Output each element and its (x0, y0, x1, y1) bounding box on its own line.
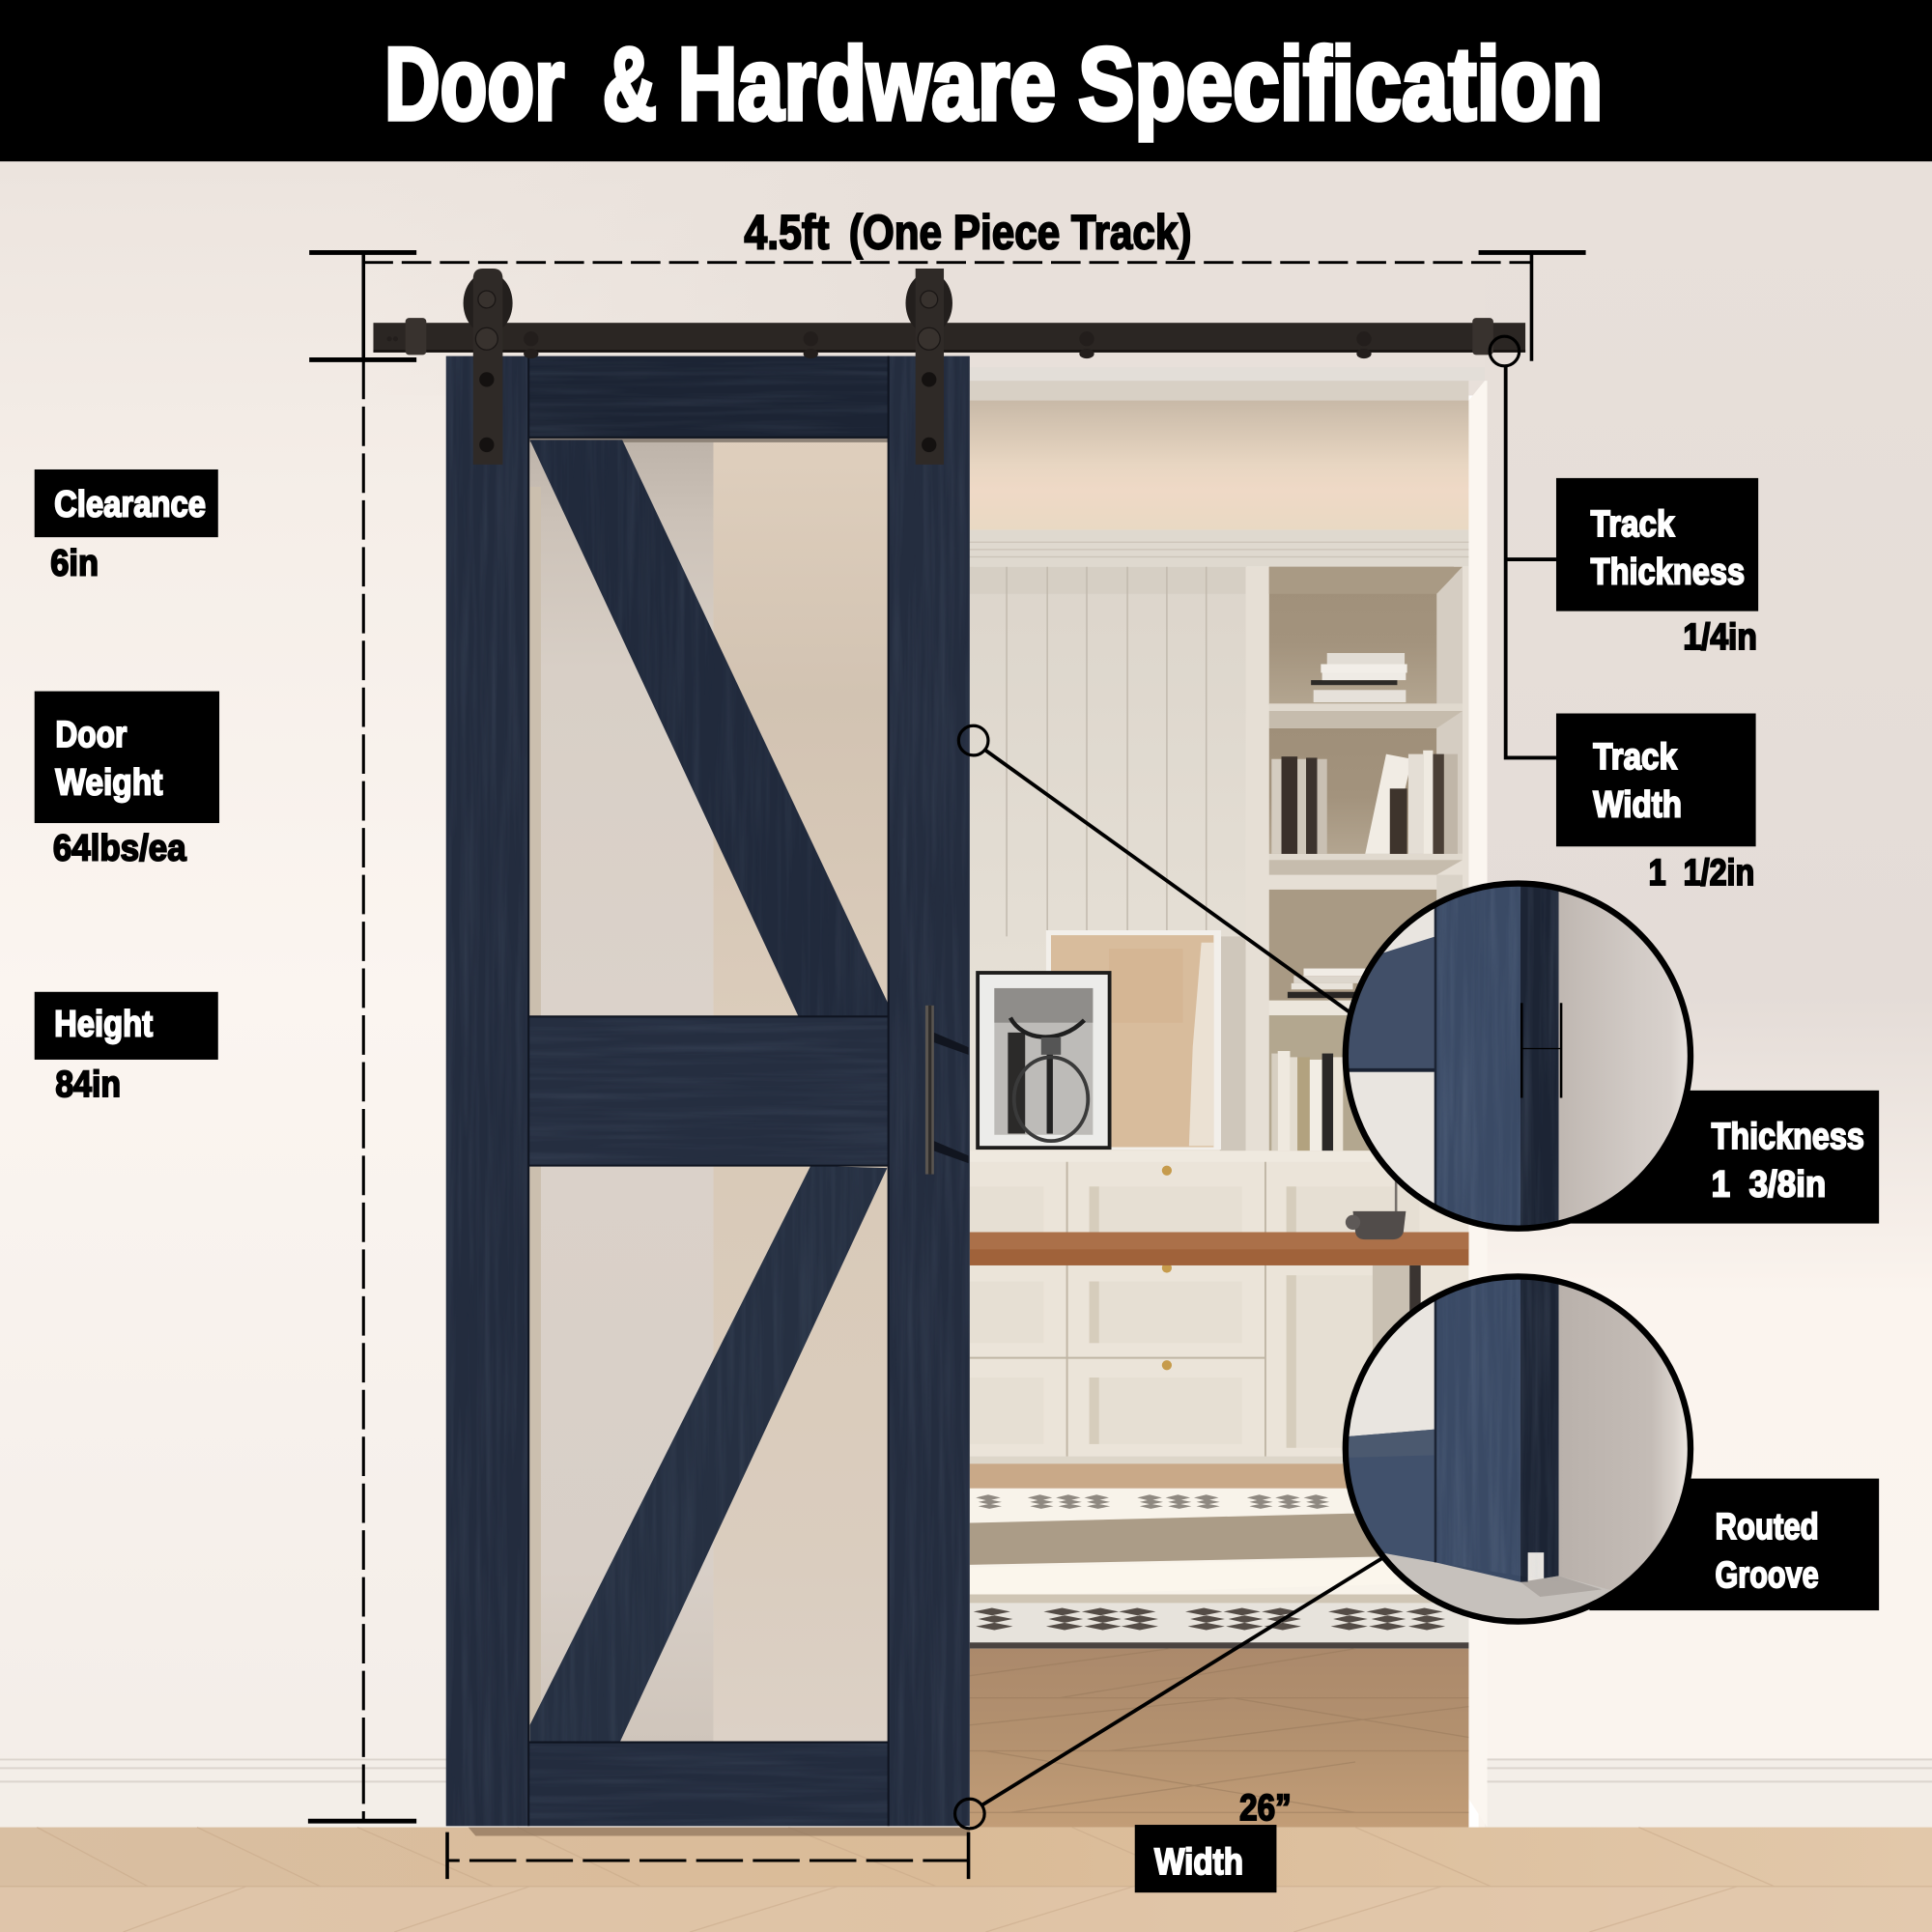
heading: track length: (One Piece Track) (849, 206, 1191, 260)
label: door width: 26” (1239, 1787, 1292, 1829)
label: routed groove box (1589, 1479, 1879, 1610)
hardwood floor (0, 1828, 1932, 1932)
dimension line: door width (447, 1833, 969, 1879)
baseboard (0, 1758, 1932, 1829)
hanger strap right (906, 269, 952, 465)
label: door weight: Weight (55, 762, 163, 804)
label: track thickness: 1/4in (1683, 616, 1757, 658)
ceiling area (970, 401, 1468, 529)
crown molding (970, 529, 1468, 567)
door pull handle (925, 1006, 969, 1175)
label: clearance (35, 469, 218, 584)
label: routed groove box: Groove (1716, 1554, 1819, 1596)
label: track width (1556, 714, 1756, 894)
art print: bicycle photo (976, 971, 1112, 1150)
label: door width (1135, 1787, 1292, 1892)
label: door width: Width (1154, 1841, 1243, 1883)
title banner: Specification (1078, 26, 1603, 142)
label: height: Height (54, 1004, 153, 1045)
shelf books (1271, 653, 1458, 1151)
label: track thickness: Track (1591, 503, 1675, 545)
back floor and rug (970, 1463, 1468, 1649)
label: track width: Width (1593, 784, 1682, 826)
label: door weight: Door (55, 714, 127, 755)
callout leader: routed groove (955, 1555, 1387, 1829)
label: track width: 1 1/2in (1649, 852, 1754, 894)
heading: track length: 4.5ft (744, 206, 829, 260)
label: thickness box: 1 3/8in (1712, 1164, 1826, 1206)
magnifier: door thickness detail (1346, 884, 1690, 1229)
label: thickness box: Thickness (1712, 1116, 1864, 1157)
label: track thickness (1556, 478, 1758, 658)
room hardwood (970, 1649, 1468, 1828)
label: track width: Track (1593, 736, 1678, 778)
room seen through the doorway (970, 367, 1488, 1828)
magnifier: routed groove detail (1346, 1276, 1690, 1622)
rug pattern: upper diamonds (976, 1494, 1329, 1509)
bookshelf (1246, 567, 1468, 1162)
barn door (446, 356, 970, 1826)
label: clearance: Clearance (54, 483, 206, 525)
title banner: Door (384, 26, 564, 142)
label: height: 84in (55, 1064, 121, 1105)
track stops (406, 318, 1493, 355)
hanger strap left (464, 269, 513, 465)
desk (970, 1180, 1468, 1321)
heading: track length (744, 206, 1191, 260)
title banner: Hardware (678, 26, 1056, 142)
barn door track (373, 318, 1525, 358)
panelled wall (970, 567, 1247, 1162)
dimension lines: clearance, track length, height (308, 252, 1586, 1821)
title banner: & (603, 26, 657, 142)
door frame and braces (446, 356, 970, 1826)
label: thickness box (1565, 1091, 1879, 1224)
label: routed groove box: Routed (1716, 1506, 1819, 1548)
label: track thickness: Thickness (1591, 552, 1745, 593)
rug pattern: lower diamonds (974, 1608, 1445, 1631)
art print: canvas (1046, 930, 1221, 1150)
label: clearance: 6in (50, 543, 99, 584)
track bolts (387, 331, 1372, 358)
opening reveal (970, 367, 1488, 1828)
callout leader: thickness (958, 725, 1350, 1012)
frosted glass panels (528, 438, 889, 1743)
label: height (35, 992, 218, 1105)
callout leader: track (1490, 336, 1556, 757)
label: door weight (35, 692, 219, 868)
title banner (0, 0, 1932, 161)
label: door weight: 64lbs/ea (53, 827, 186, 868)
cabinets (970, 1151, 1468, 1465)
